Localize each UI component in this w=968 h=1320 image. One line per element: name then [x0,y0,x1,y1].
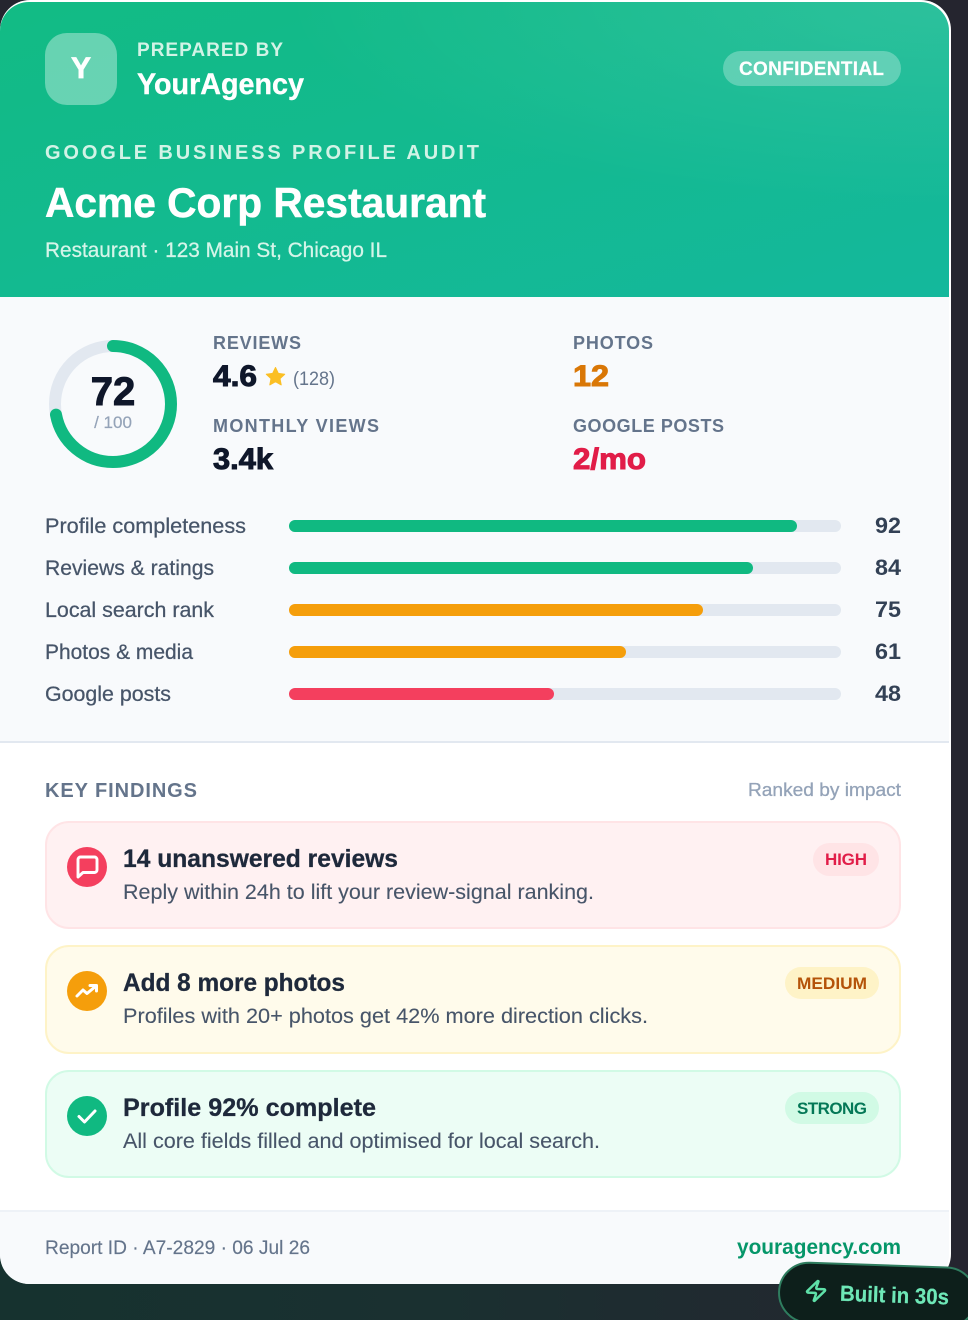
badge: medium: MEDIUM [797,974,867,993]
bar: profile completeness: 92 [875,513,901,538]
badge: high [813,843,879,876]
finding: profile complete: Profile 92% complete [123,1094,376,1122]
agency logo: Y [71,52,91,85]
stat: photos [574,336,652,386]
score ring: / 100 [94,413,132,432]
icon: lightning bolt [807,1281,825,1301]
finding: add photos [46,946,900,1053]
bar: profile completeness: Profile completeness [45,515,246,538]
bar: reviews and ratings: 84 [875,555,902,580]
panel: footer [0,1210,950,1284]
finding: profile complete [46,1071,900,1177]
bar: google posts: 48 [875,681,901,706]
stat: google posts: GOOGLE POSTS [573,416,724,436]
icon: star [266,368,285,385]
prepared by label: PREPARED BY [137,40,283,61]
icon: trending up [67,971,107,1011]
stat: monthly views [213,419,378,470]
stat: reviews: 4.6 [213,360,257,393]
stat: reviews [212,336,334,389]
bar: reviews and ratings: Reviews & ratings [45,557,214,580]
bar: local search rank: 75 [875,597,901,622]
confidential badge [723,51,901,86]
stat: reviews: (128) [293,369,335,390]
agency name: YourAgency [137,68,304,101]
badge: strong: STRONG [797,1099,867,1118]
findings heading: KEY FINDINGS [45,780,197,802]
confidential badge: CONFIDENTIAL [739,59,884,80]
stat: monthly views: MONTHLY VIEWS [213,416,379,436]
bar: photos and media: Photos & media [45,641,193,664]
agency logo [45,33,117,105]
bar: google posts: Google posts [45,683,171,706]
business address: Restaurant · 123 Main St, Chicago IL [45,239,387,262]
score ring: 72 [91,370,135,414]
bar: local search rank [46,601,900,618]
score ring [55,346,171,462]
finding: add photos: Add 8 more photos [123,969,345,997]
report id: Report ID · A7-2829 · 06 Jul 26 [45,1238,310,1259]
bar: reviews and ratings [46,559,901,580]
bar: profile completeness [46,517,900,538]
panel: scores [46,336,901,706]
badge: high: HIGH [825,850,867,869]
icon: check mark [67,1096,107,1136]
stat: reviews: REVIEWS [213,333,301,353]
finding: add photos: Profiles with 20+ photos get 42% more direction clicks. [123,1005,648,1028]
icon: speech bubble [67,847,107,887]
built in 30s badge: Built in 30s [840,1281,949,1310]
finding: unanswered reviews: Reply within 24h to lift your review-signal ranking. [123,881,594,904]
stat: google posts: 2/mo [573,443,646,476]
bar: photos and media: 61 [875,639,901,664]
finding: unanswered reviews: 14 unanswered reviews [123,845,398,873]
stat: photos: PHOTOS [573,333,653,353]
bar: local search rank: Local search rank [45,599,214,622]
agency website: youragency.com [737,1236,901,1259]
stat: photos: 12 [573,360,609,393]
bar: photos and media [46,643,900,660]
finding: unanswered reviews [46,822,900,928]
built in 30s badge [778,1262,968,1320]
badge: strong [785,1092,879,1124]
bar chart [45,513,902,706]
panel: key findings [45,782,901,1178]
panel: header [0,1,950,297]
stat: monthly views: 3.4k [213,443,273,476]
finding: profile complete: All core fields filled and optimised for local search. [123,1130,600,1153]
ranked by impact note: Ranked by impact [748,779,901,800]
badge: medium [785,967,879,999]
audit eyebrow: GOOGLE BUSINESS PROFILE AUDIT [45,142,479,164]
stat: google posts [574,419,724,470]
bar: google posts [46,685,900,706]
business name: Acme Corp Restaurant [45,179,486,226]
